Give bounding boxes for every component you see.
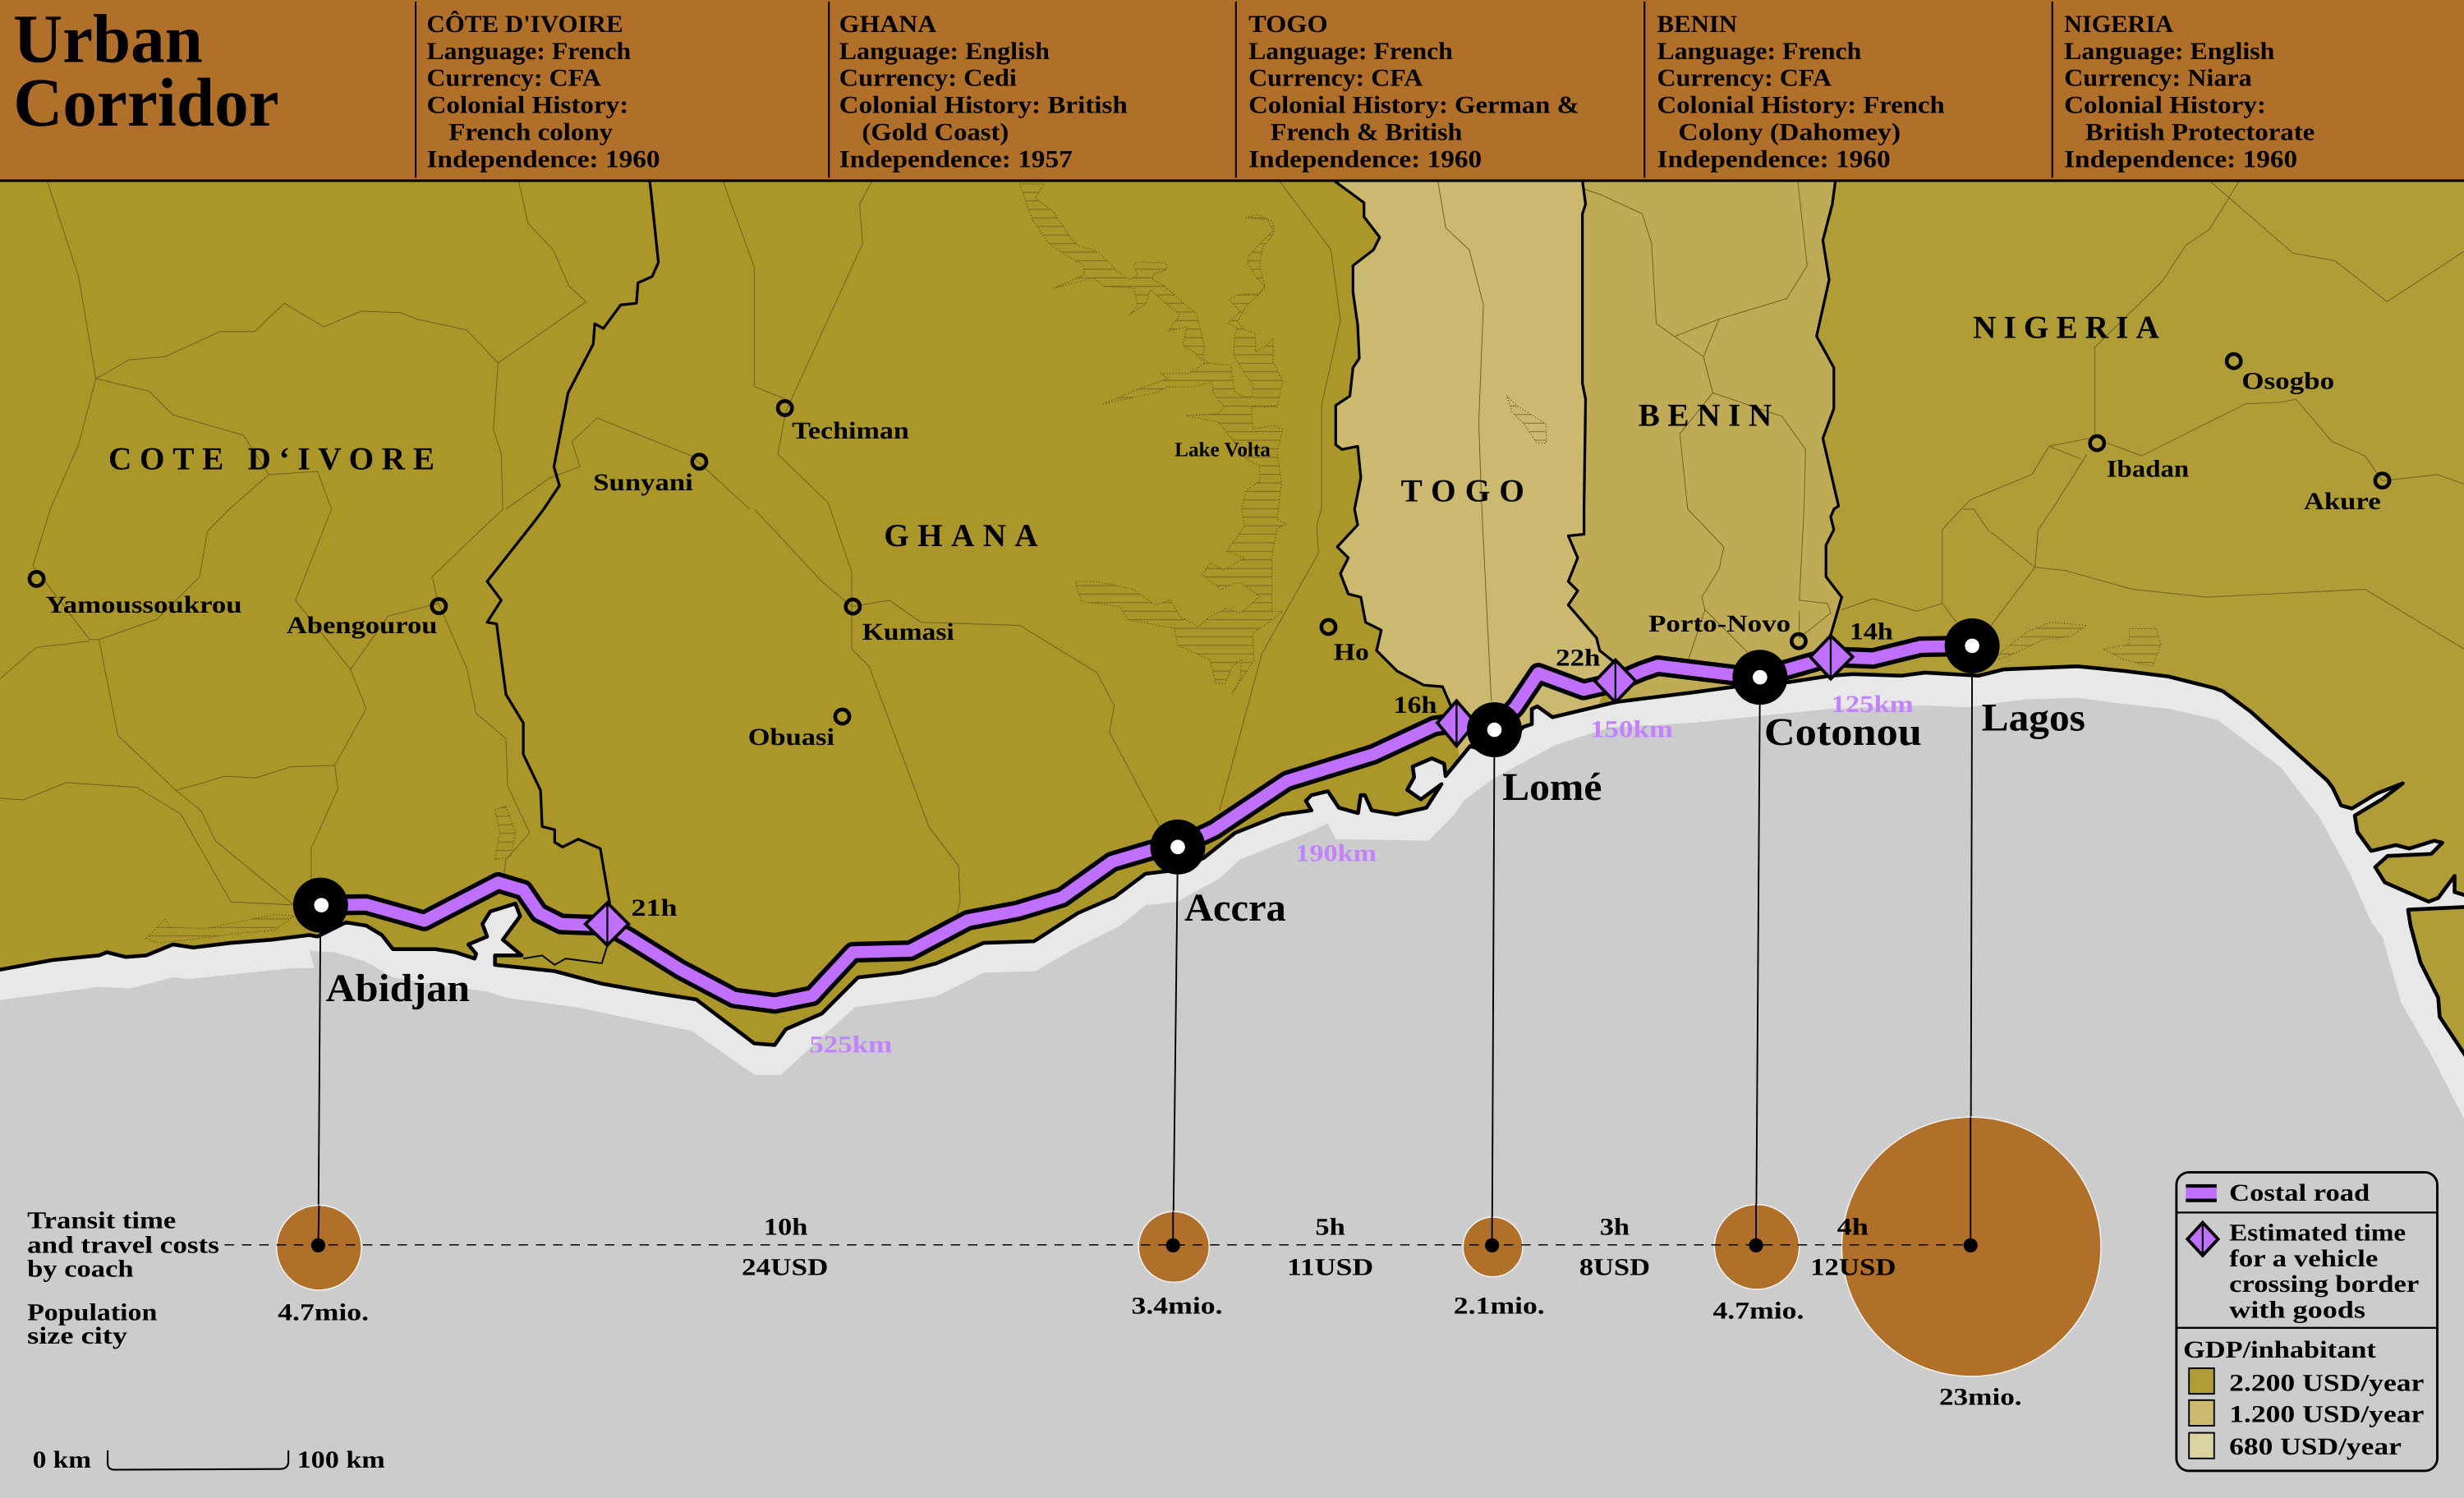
secondary cities	[30, 354, 2389, 751]
secondary cities: Abengourou	[287, 613, 438, 640]
row descriptions: by coach	[27, 1257, 135, 1283]
secondary cities: Kumasi	[862, 619, 955, 646]
main city names: Cotonou	[1764, 712, 1922, 754]
border crossing times: 14h	[1850, 618, 1894, 646]
country facts: Ghana: Currency: Cedi	[839, 66, 1018, 92]
country facts: Nigeria: British Protectorate	[2085, 119, 2315, 146]
border crossing diamonds	[586, 636, 1853, 945]
country facts: Nigeria: Independence: 1960	[2064, 147, 2298, 173]
population values	[278, 1294, 2022, 1411]
country facts: Benin: Currency: CFA	[1657, 66, 1832, 92]
country facts: Nigeria	[2064, 11, 2315, 173]
secondary cities: Osogbo	[2241, 369, 2335, 395]
country facts: Benin: Independence: 1960	[1657, 147, 1891, 173]
legend: with goods	[2229, 1298, 2365, 1324]
legend: GDP/inhabitant	[2183, 1337, 2378, 1364]
scale bar	[33, 1447, 385, 1474]
country facts: Ghana: Independence: 1957	[839, 147, 1073, 173]
main city names: Lomé	[1502, 767, 1602, 809]
population values: 4.7mio.	[278, 1299, 369, 1326]
country facts: Côte d'Ivoire: Independence: 1960	[426, 147, 660, 173]
bubble centre dots	[311, 1117, 1978, 1252]
row descriptions: and travel costs	[27, 1232, 219, 1259]
country facts: Togo	[1248, 11, 1579, 173]
transit times and costs: 8USD	[1579, 1255, 1650, 1281]
land: Nigeria	[1818, 182, 2464, 899]
main city names: Accra	[1184, 888, 1287, 931]
border crossing times: 22h	[1556, 646, 1601, 672]
main city names: Lagos	[1982, 698, 2085, 740]
land: Côte d'Ivoire and Ghana	[0, 181, 2464, 1045]
country facts: Ghana: Colonial History: British	[839, 93, 1128, 119]
transit times and costs: 5h	[1315, 1215, 1346, 1241]
coastal road	[320, 646, 1972, 1004]
country facts: Ghana: (Gold Coast)	[862, 119, 1009, 146]
transit times and costs: 24USD	[742, 1255, 828, 1281]
country facts: Nigeria: Currency: Niara	[2064, 66, 2252, 92]
legend: Costal road	[2229, 1180, 2370, 1206]
country names on map: TOGO	[1401, 475, 1524, 509]
regional boundaries	[0, 181, 2464, 931]
secondary cities: Yamoussoukrou	[45, 592, 243, 619]
secondary cities: Akure	[2304, 489, 2381, 516]
country facts: Ghana	[839, 11, 1128, 173]
legend: for a vehicle	[2229, 1246, 2379, 1273]
row descriptions: size city	[27, 1323, 128, 1350]
border crossing times: 21h	[632, 895, 678, 922]
country facts: Togo: Colonial History: German &	[1248, 93, 1579, 119]
leader lines from cities to bubbles	[318, 646, 1972, 1246]
border crossing times: 16h	[1393, 692, 1437, 719]
Lake Volta	[1020, 184, 1287, 694]
country names on map	[108, 311, 2159, 554]
country facts: Côte d'Ivoire	[426, 10, 660, 173]
country facts: Nigeria: Colonial History:	[2064, 93, 2266, 119]
scale bar: 0 km	[33, 1447, 91, 1474]
country facts: Côte d'Ivoire: CÔTE D'IVOIRE	[426, 10, 623, 38]
legend: 1.200 USD/year	[2229, 1402, 2425, 1428]
legend	[2177, 1172, 2437, 1471]
country facts: Togo: Currency: CFA	[1248, 66, 1424, 92]
country names on map: BENIN	[1639, 399, 1772, 434]
row descriptions: Transit time	[27, 1207, 177, 1234]
title	[13, 1, 279, 141]
main city names: Abidjan	[326, 968, 470, 1010]
population values: 2.1mio.	[1454, 1294, 1545, 1320]
country facts: Benin: BENIN	[1657, 11, 1739, 38]
country facts: Benin	[1657, 11, 1945, 173]
title: Corridor	[13, 64, 279, 141]
country facts: Côte d'Ivoire: Language: French	[426, 39, 632, 65]
small lagoons	[146, 396, 2161, 943]
transit times and costs: 4h	[1837, 1215, 1869, 1241]
row descriptions: Population	[27, 1299, 158, 1326]
country facts: Togo: Independence: 1960	[1248, 147, 1483, 173]
road distances: 125km	[1832, 692, 1914, 718]
transit times and costs: 11USD	[1287, 1255, 1373, 1281]
main city markers	[293, 618, 2000, 933]
country names on map: COTE D‘IVORE	[108, 443, 434, 477]
legend: 2.200 USD/year	[2229, 1370, 2425, 1397]
transit times and costs: 10h	[764, 1215, 808, 1241]
road distances: 525km	[809, 1032, 893, 1059]
country facts: Ghana: GHANA	[839, 11, 938, 38]
land: Benin	[1568, 181, 1841, 738]
scale bar: 100 km	[297, 1447, 385, 1474]
title: Urban	[13, 1, 203, 78]
secondary cities: Ibadan	[2107, 456, 2190, 483]
road distances: 190km	[1295, 841, 1377, 867]
country names on map: NIGERIA	[1973, 311, 2159, 346]
country facts: Nigeria: Language: English	[2064, 39, 2275, 65]
lake label: Lake Volta	[1175, 438, 1271, 461]
secondary cities: Porto-Novo	[1648, 611, 1791, 638]
country facts: Togo: TOGO	[1248, 11, 1328, 38]
secondary cities: Obuasi	[748, 724, 836, 751]
road distances: 150km	[1590, 717, 1673, 743]
legend: 680 USD/year	[2229, 1434, 2402, 1461]
country facts: Côte d'Ivoire: French colony	[448, 119, 614, 146]
secondary cities: Techiman	[792, 418, 910, 444]
country facts: Ghana: Language: English	[839, 39, 1050, 65]
country facts: Côte d'Ivoire: Currency: CFA	[426, 66, 602, 92]
transit times and costs: 12USD	[1810, 1255, 1896, 1281]
secondary cities: Sunyani	[593, 470, 694, 497]
country facts: Benin: Language: French	[1657, 39, 1862, 65]
header band	[0, 0, 2464, 182]
country facts: Nigeria: NIGERIA	[2064, 11, 2174, 38]
country facts: Togo: French & British	[1271, 119, 1463, 146]
country names on map: GHANA	[884, 519, 1038, 554]
national borders	[487, 181, 1841, 965]
population values: 23mio.	[1939, 1385, 2022, 1411]
transit times and costs	[742, 1215, 1896, 1281]
border crossing times	[632, 618, 1894, 922]
country facts: Togo: Language: French	[1248, 39, 1453, 65]
main city names	[326, 698, 2085, 1010]
country facts: Benin: Colonial History: French	[1657, 93, 1945, 119]
land: Togo	[1334, 181, 1616, 770]
legend: Estimated time	[2229, 1220, 2407, 1247]
population values: 3.4mio.	[1132, 1294, 1223, 1320]
legend: crossing border	[2229, 1271, 2420, 1298]
transit axis	[225, 1244, 1965, 1246]
secondary cities: Ho	[1334, 640, 1369, 666]
road distances	[809, 692, 1914, 1059]
shallow coastal water	[0, 172, 2464, 1134]
country facts: Benin: Colony (Dahomey)	[1678, 119, 1901, 146]
transit times and costs: 3h	[1600, 1215, 1630, 1241]
population bubbles	[277, 1117, 2101, 1376]
delta island	[2408, 907, 2464, 1065]
coastline	[0, 666, 2464, 1045]
population values: 4.7mio.	[1712, 1298, 1804, 1325]
country facts: Côte d'Ivoire: Colonial History:	[426, 93, 628, 119]
row descriptions	[27, 1207, 219, 1350]
